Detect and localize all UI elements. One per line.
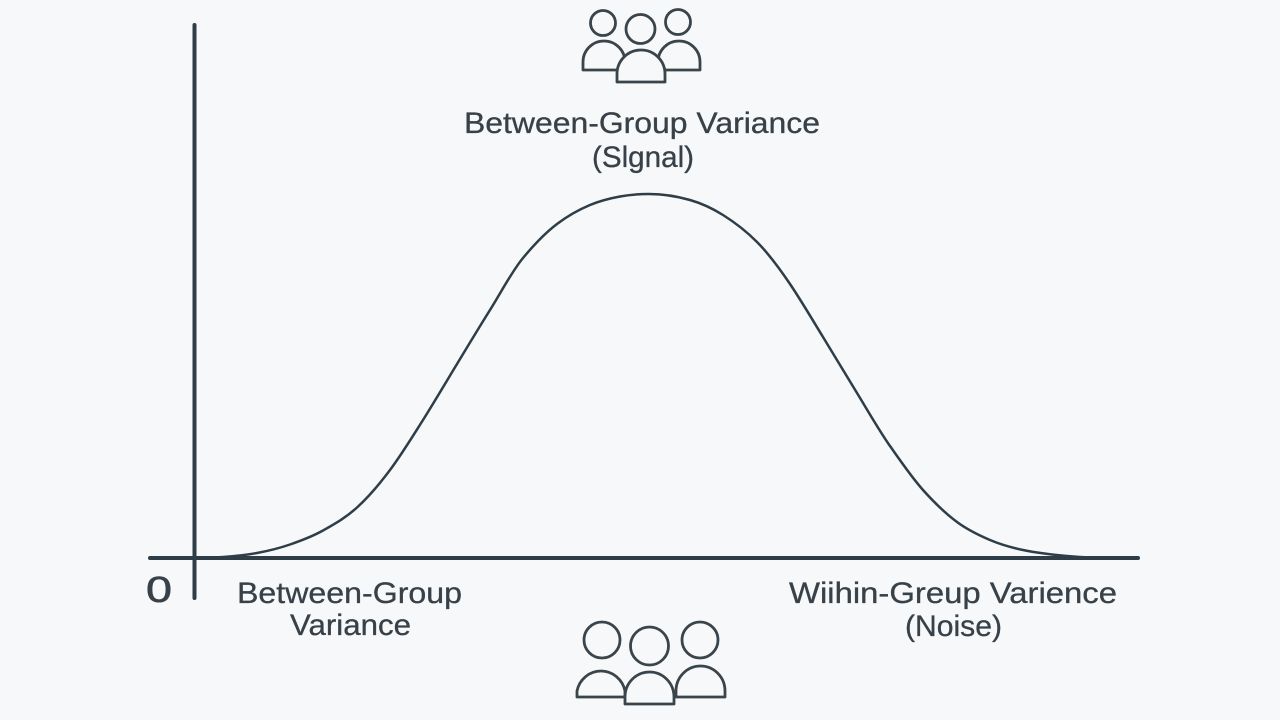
heading: between-group variance signal	[464, 107, 820, 174]
bell curve	[196, 194, 1110, 558]
icon: group of people, top	[583, 10, 700, 82]
label: between-group variance	[237, 577, 462, 642]
label: within-group variance noise: (Noise)	[905, 610, 1002, 643]
y axis	[192, 25, 196, 598]
heading: between-group variance signal: Between-Group Variance	[464, 107, 820, 140]
label: between-group variance: Between-Group	[237, 577, 462, 610]
label: within-group variance noise: Wiihin-Greup Varience	[789, 577, 1117, 610]
x axis	[150, 556, 1138, 560]
axis origin label: 0	[146, 569, 172, 610]
icon: group of people, bottom	[577, 622, 725, 704]
heading: between-group variance signal: (Slgnal)	[592, 141, 694, 174]
label: between-group variance: Variance	[290, 609, 411, 642]
label: within-group variance noise	[789, 577, 1117, 643]
